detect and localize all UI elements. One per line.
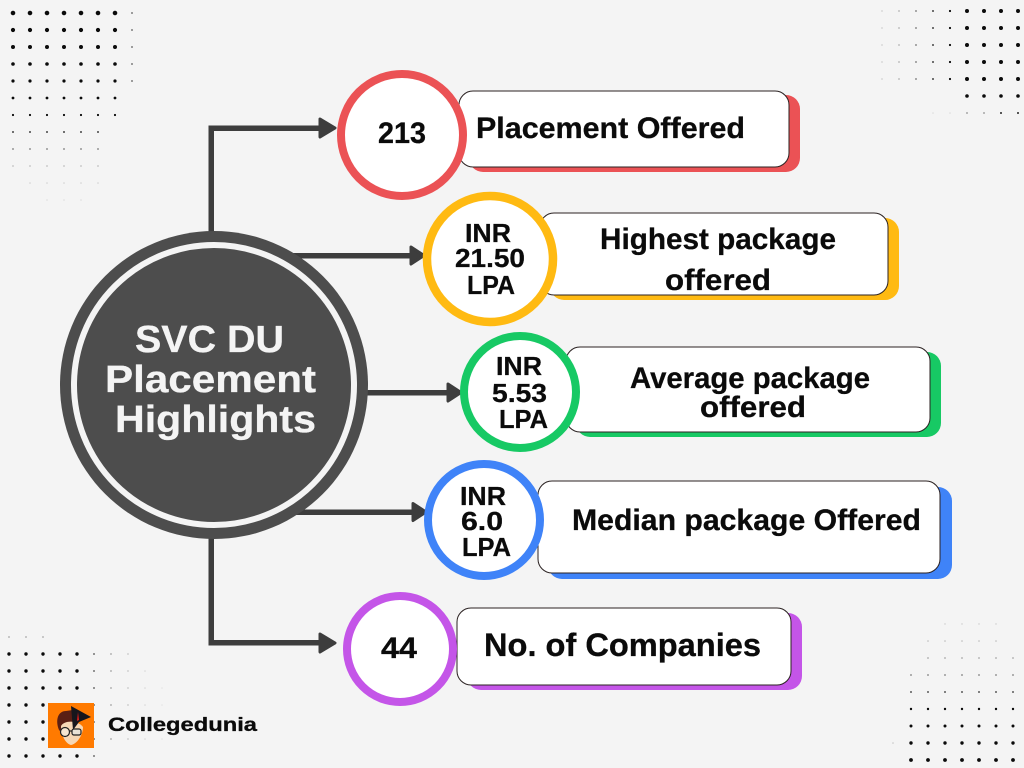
arrow: top branch to Placement Offered	[208, 119, 335, 232]
stat circle: 213: 213	[378, 117, 426, 150]
icon: student face mascot	[48, 703, 94, 748]
panel: No. of Companies	[347, 596, 802, 702]
stat circle: INR 5.53 LPA: LPA	[499, 404, 548, 434]
label: Highest package offered: offered	[665, 264, 771, 297]
arrow: to Median package	[290, 504, 426, 520]
heading: central title: Placement	[105, 359, 316, 401]
arrow: bottom branch to No. of Companies	[208, 535, 335, 652]
label: Average package offered: offered	[700, 391, 806, 424]
stat circle: INR 6.0 LPA: LPA	[462, 532, 511, 562]
panel: Average package offered	[464, 336, 941, 448]
stat circle: INR 21.50 LPA: INR	[465, 218, 511, 248]
panel: Median package Offered	[428, 464, 952, 579]
stat circle: INR 6.0 LPA	[428, 464, 540, 576]
label: Highest package offered: Highest package	[600, 223, 836, 256]
stat circle: INR 6.0 LPA: INR	[460, 481, 506, 511]
panel: Placement Offered	[341, 74, 800, 196]
stat circle: INR 21.50 LPA: LPA	[467, 270, 515, 300]
connector arrows	[208, 119, 461, 652]
stat circle: 44: 44	[381, 632, 417, 665]
stat circle: INR 5.53 LPA	[464, 336, 576, 448]
panel: Highest package offered	[427, 196, 899, 322]
label: Placement Offered: Placement Offered	[476, 112, 745, 145]
heading: central title: SVC DU	[135, 319, 284, 361]
label: Highest package offered	[600, 223, 836, 297]
label: Median package Offered: Median package Offered	[572, 504, 921, 537]
stat circle: INR 5.53 LPA: INR	[496, 351, 542, 381]
stat circle: 213	[341, 74, 463, 196]
logo: Collegedunia	[48, 703, 258, 748]
stat circle: 44	[347, 596, 453, 702]
wordmark: Collegedunia	[108, 715, 258, 736]
label: Average package offered: Average package	[630, 362, 870, 395]
stat circle: INR 6.0 LPA: 6.0	[461, 506, 503, 536]
stat circle: INR 21.50 LPA: 21.50	[455, 243, 525, 273]
label: No. of Companies: No. of Companies	[484, 627, 761, 663]
arrow: to Highest package	[290, 247, 424, 264]
label: Average package offered	[630, 362, 870, 424]
heading: central title	[105, 319, 316, 441]
stat circle: INR 21.50 LPA	[427, 196, 553, 322]
arrow: to Average package	[366, 384, 461, 401]
stat circle: INR 5.53 LPA: 5.53	[492, 378, 547, 408]
heading: central title: Highlights	[115, 399, 316, 441]
central circle: SVC DU Placement Highlights	[60, 231, 368, 539]
